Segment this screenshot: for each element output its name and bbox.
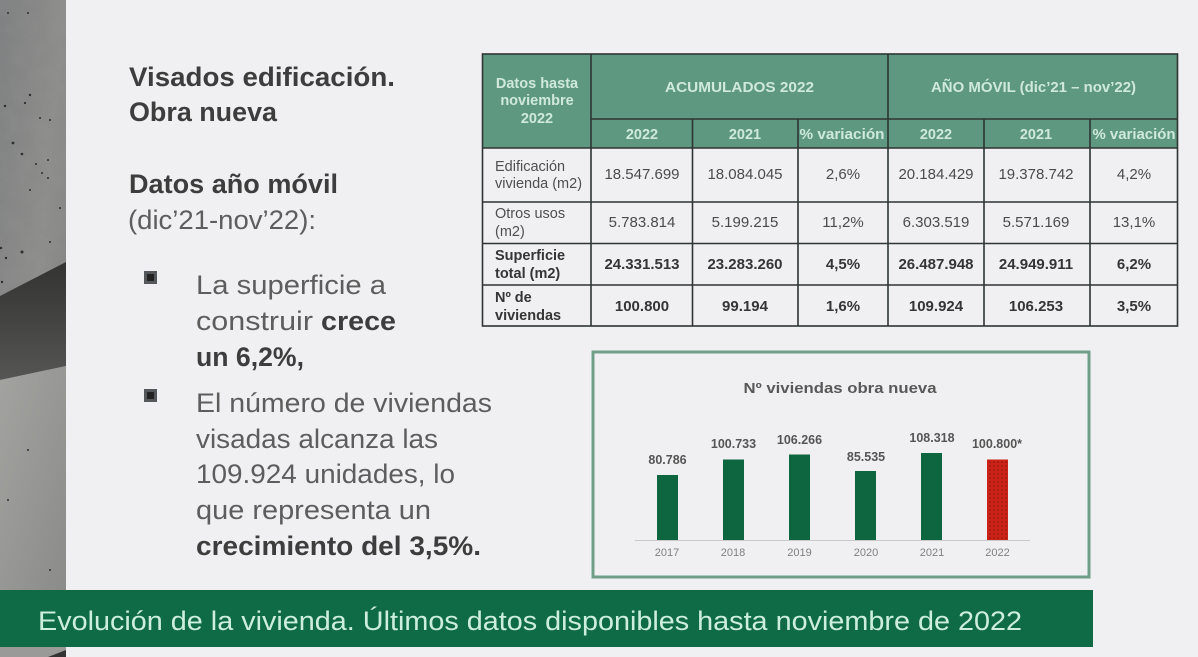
- bullet point: viviendas: [144, 388, 492, 561]
- row: otros usos: 13,1%: [1113, 214, 1155, 231]
- row: otros usos: Otros usos: [495, 206, 565, 222]
- footer banner: [0, 590, 1093, 647]
- row: superficie total: total (m2): [495, 266, 560, 282]
- bar chart: 2019: [787, 547, 812, 559]
- bar chart: 2021: [920, 547, 944, 559]
- bullet point: viviendas: crecimiento del 3,5%.: [196, 531, 481, 561]
- bar chart: 2017: [655, 547, 679, 559]
- row: edificación vivienda: 18.084.045: [707, 166, 783, 183]
- row: otros usos: 5.783.814: [609, 214, 675, 231]
- bar chart: 108.318: [909, 431, 955, 445]
- row: superficie total: 26.487.948: [898, 256, 974, 273]
- bullet point: superficie: construir: [196, 306, 313, 336]
- table header: 2022: [920, 127, 952, 143]
- table header: noviembre: [500, 93, 574, 109]
- row: edificación vivienda: 4,2%: [1117, 166, 1151, 183]
- footer banner: Evolución de la vivienda. Últimos datos disponibles hasta noviembre de 2022: [38, 605, 1022, 636]
- bar chart: [635, 431, 1030, 559]
- bullet point: viviendas: 109.924 unidades, lo: [196, 459, 455, 489]
- bar chart: 2018: [721, 547, 745, 559]
- concrete photo strip: [0, 0, 66, 657]
- row: otros usos: [495, 206, 1155, 240]
- subheading: datos año móvil: (dic’21-nov’22):: [128, 205, 316, 235]
- row: superficie total: 24.331.513: [604, 256, 680, 273]
- table header: 2022: [626, 127, 658, 143]
- bar chart: 106.266: [777, 433, 822, 447]
- row: nº de viviendas: viviendas: [495, 308, 561, 324]
- row: edificación vivienda: Edificación: [495, 159, 565, 175]
- subheading: datos año móvil: Datos año móvil: [129, 169, 338, 199]
- row: nº de viviendas: [495, 290, 1151, 324]
- bar chart: 100.733: [711, 437, 756, 451]
- row: superficie total: Superficie: [495, 248, 565, 264]
- bullet point: viviendas: El número de viviendas: [196, 388, 492, 418]
- row: otros usos: (m2): [495, 224, 525, 240]
- table header: 2021: [729, 127, 761, 143]
- bullet point: superficie: un 6,2%,: [196, 342, 304, 372]
- row: superficie total: 6,2%: [1117, 256, 1151, 273]
- row: nº de viviendas: 3,5%: [1117, 298, 1151, 315]
- table header: ACUMULADOS 2022: [665, 80, 814, 96]
- row: superficie total: [495, 248, 1151, 282]
- data table: [482, 54, 1178, 326]
- table header: 2021: [1020, 127, 1052, 143]
- bar chart: 80.786: [648, 453, 687, 467]
- bullet point: viviendas: que representa un: [196, 495, 431, 525]
- row: superficie total: 24.949.911: [999, 256, 1073, 273]
- chart title: Nº viviendas obra nueva: [744, 381, 938, 397]
- table header: % variación: [1092, 127, 1176, 143]
- heading: Visados edificación: Visados edificación.: [129, 62, 395, 92]
- row: nº de viviendas: 99.194: [722, 298, 769, 315]
- bar chart: 2020: [854, 547, 878, 559]
- chart panel: Nº viviendas obra nueva: [593, 352, 1089, 577]
- table header: 2022: [521, 111, 553, 127]
- bullet point: superficie: crece: [321, 306, 396, 336]
- row: edificación vivienda: 19.378.742: [998, 166, 1074, 183]
- row: edificación vivienda: [495, 159, 1151, 192]
- row: superficie total: 23.283.260: [707, 256, 783, 273]
- subheading: datos año móvil: [128, 169, 338, 235]
- row: otros usos: 5.199.215: [712, 214, 778, 231]
- table header: AÑO MÓVIL (dic’21 – nov’22): [931, 78, 1136, 96]
- row: otros usos: 11,2%: [822, 214, 864, 231]
- row: nº de viviendas: 1,6%: [826, 298, 860, 315]
- row: nº de viviendas: 106.253: [1009, 298, 1063, 315]
- table header: % variación: [800, 127, 884, 143]
- table header: Datos hasta: [496, 76, 579, 92]
- row: nº de viviendas: 109.924: [909, 298, 964, 315]
- heading: Visados edificación: Obra nueva: [129, 97, 278, 127]
- row: otros usos: 6.303.519: [903, 214, 969, 231]
- bullet point: superficie: [144, 270, 396, 372]
- heading: Visados edificación: [129, 62, 395, 127]
- row: edificación vivienda: vivienda (m2): [495, 176, 582, 192]
- row: edificación vivienda: 20.184.429: [898, 166, 974, 183]
- row: edificación vivienda: 18.547.699: [604, 166, 680, 183]
- table header: [482, 54, 1178, 148]
- row: nº de viviendas: 100.800: [615, 298, 669, 315]
- row: nº de viviendas: Nº de: [495, 290, 532, 306]
- row: edificación vivienda: 2,6%: [826, 166, 860, 183]
- bullet point: superficie: La superficie a: [196, 270, 387, 300]
- bullet point: viviendas: visadas alcanza las: [196, 424, 438, 454]
- bar chart: 85.535: [847, 450, 885, 464]
- row: superficie total: 4,5%: [826, 256, 860, 273]
- bar chart: 2022: [985, 547, 1010, 559]
- row: otros usos: 5.571.169: [1003, 214, 1069, 231]
- bar chart: 100.800*: [972, 437, 1022, 451]
